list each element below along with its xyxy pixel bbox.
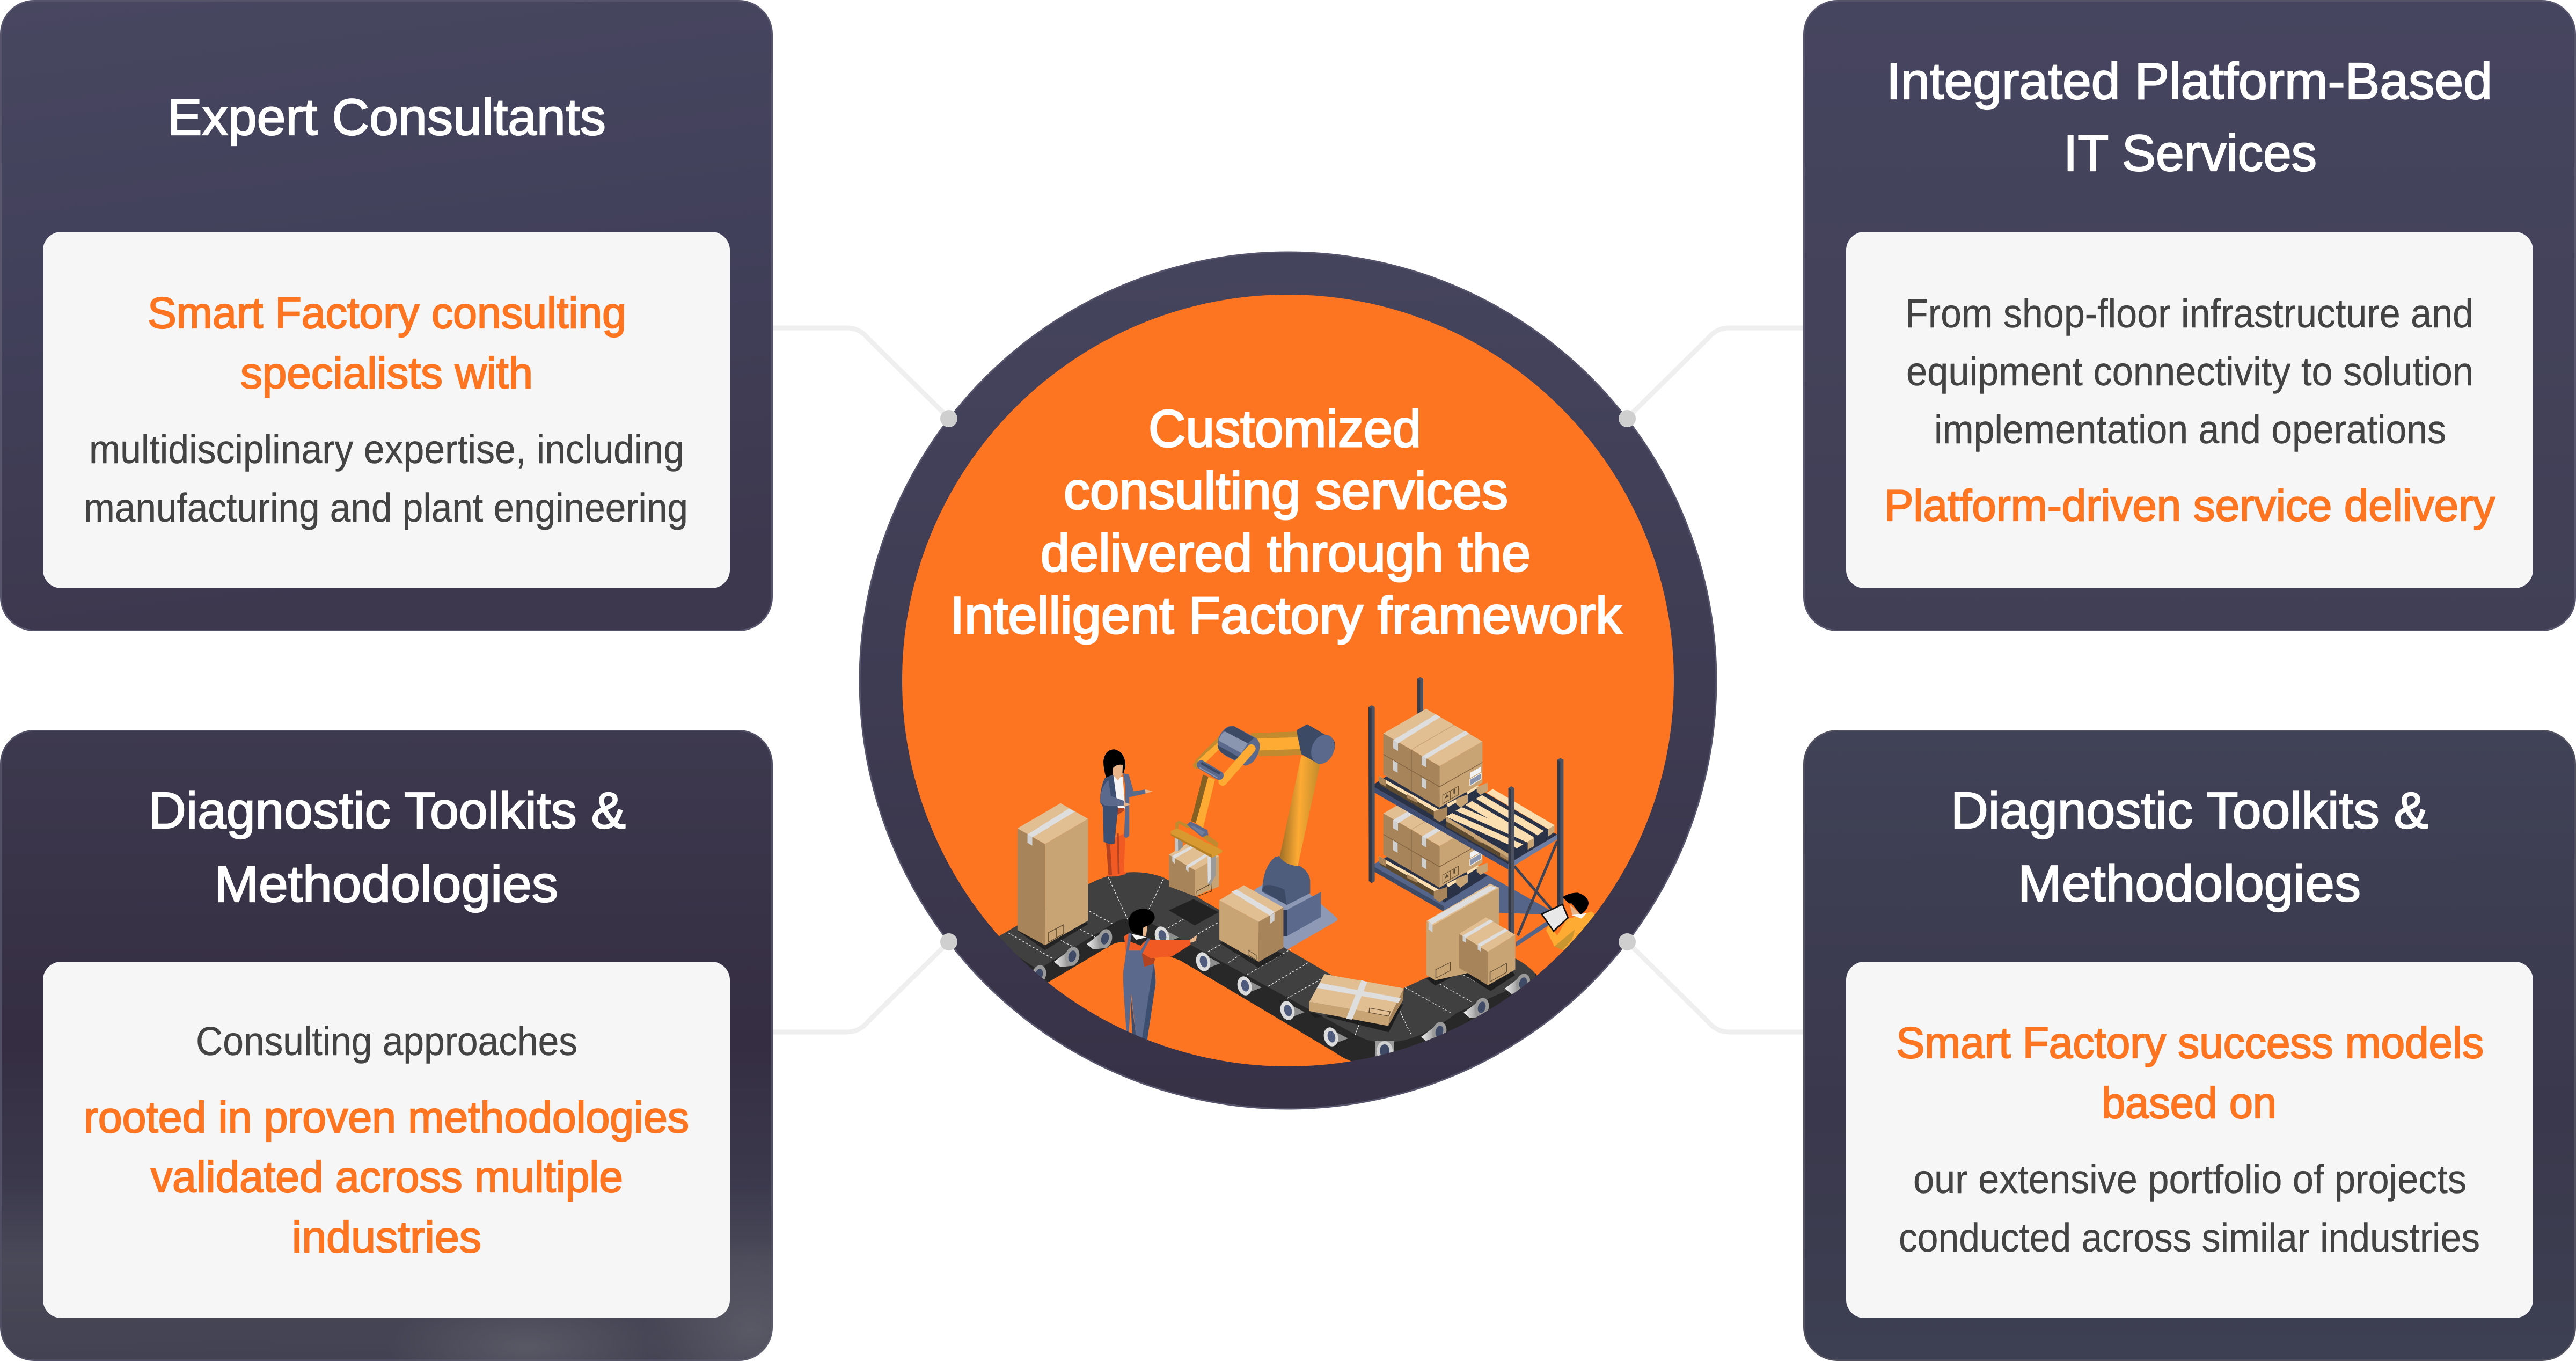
card: platform services text [1846,232,2533,588]
central hub circle [860,252,1716,1109]
heading: diagnostic toolkits right: Methodologies [2018,855,2361,912]
heading: diagnostic toolkits right [1951,782,2428,912]
orange disc [899,291,1677,1070]
connector dot: top right [1619,410,1636,427]
stitching on right half [1355,973,1491,1035]
card: success models text: conducted across similar industries [1899,1215,2480,1260]
card: platform services text: From shop-floor infrastructure and [1905,291,2473,336]
heading: diagnostic toolkits left: Diagnostic Toolkits & [149,782,626,839]
heading: hub statement [950,399,1622,645]
card: platform services text: implementation and operations [1934,407,2446,452]
panel: expert consultants [1,1,772,630]
card: platform services text: equipment connectivity to solution [1906,349,2473,394]
heading: integrated platform-based IT services: IT Services [2063,125,2317,182]
card: success models text: based on [2102,1079,2277,1128]
roller wheels [1021,925,1532,1060]
card: expert consultants text: manufacturing and plant engineering [84,485,688,530]
connector dot: top left [940,410,957,427]
card: expert consultants text: Smart Factory consulting [148,289,626,338]
connector dot: bottom left [940,933,957,950]
card: success models text: Smart Factory success models [1896,1019,2484,1067]
card: expert consultants text: multidisciplinary expertise, including [89,427,684,472]
card: success models text [1846,962,2533,1318]
tablet worker head and tablet [1542,892,1589,931]
card: expert consultants text [43,232,730,588]
panel: diagnostic toolkits right [1804,731,2575,1360]
card: platform services text: Platform-driven service delivery [1884,481,2495,530]
conveyor belt [993,872,1540,1065]
flat parcel, tall boxes and tablet worker [1309,884,1597,1032]
connector: right diagnostic toolkits to hub [1629,943,1803,1032]
connector dot: bottom right [1619,933,1636,950]
card: consulting approaches text [43,962,730,1318]
heading: hub statement: delivered through the [1041,524,1531,582]
glow patches at panel bottom [439,1279,773,1361]
card: consulting approaches text: Consulting approaches [196,1019,577,1064]
robot base [1251,755,1337,952]
heading: diagnostic toolkits right: Diagnostic Toolkits & [1951,782,2428,839]
large box on belt [1018,803,1088,950]
heading: diagnostic toolkits left [149,782,626,913]
heading: diagnostic toolkits left: Methodologies [215,855,558,913]
illustration: smart factory floor [993,677,1597,1065]
panel: diagnostic toolkits left [1,731,859,1361]
box in front of robot and shadows [1169,885,1283,968]
ring outer edge [860,252,1716,1109]
heading: hub statement: Intelligent Factory framework [950,586,1622,645]
storage rack with pallets [1368,677,1563,947]
conveyor stitching [1008,877,1320,998]
card: success models text: our extensive portfolio of projects [1913,1157,2467,1202]
card: consulting approaches text: validated across multiple [151,1153,623,1202]
heading: integrated platform-based IT services [1886,53,2492,182]
overalls worker [1123,909,1197,1043]
woman supervisor [1100,749,1153,876]
card: consulting approaches text: industries [292,1213,481,1262]
hub ring [881,273,1695,1088]
card: expert consultants text: specialists with [240,349,533,398]
heading: hub statement: consulting services [1064,462,1508,520]
panel: integrated platform-based IT services [1804,1,2575,630]
card: consulting approaches text: rooted in proven methodologies [84,1093,689,1142]
heading: expert consultants: Expert Consultants [167,89,606,146]
heading: integrated platform-based IT services: Integrated Platform-Based [1886,53,2492,110]
connector: integrated platform to hub [1629,328,1803,416]
robot arm [1169,724,1339,896]
heading: hub statement: Customized [1148,399,1421,458]
connector: left diagnostic toolkits to hub [773,943,947,1032]
connector: expert consultants to hub [773,328,947,416]
